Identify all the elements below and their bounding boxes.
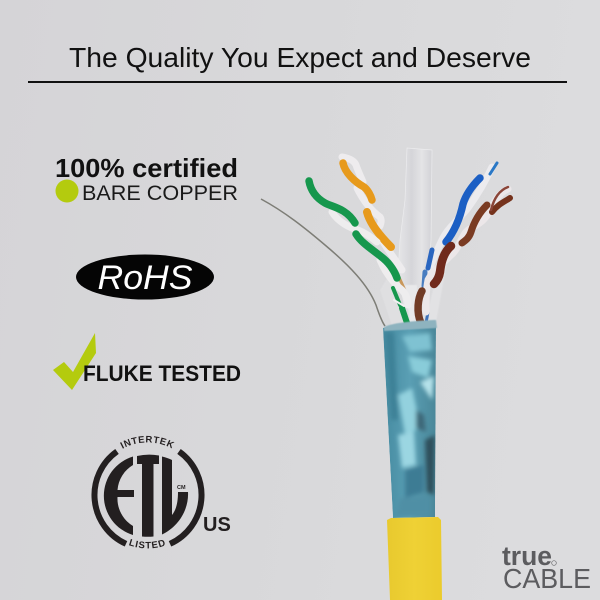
- registered mark: [552, 561, 556, 565]
- brown thin strand: [491, 187, 508, 210]
- blue tip: [490, 163, 497, 174]
- blue lower 2: [424, 272, 425, 286]
- white core: [342, 157, 402, 270]
- wire pair: orange: [342, 157, 407, 295]
- logo: ETL Intertek listed: [91, 436, 231, 548]
- badge: 100% certified bare copper: [55, 153, 238, 205]
- white core: [332, 212, 408, 305]
- orange strand lower: [367, 212, 391, 247]
- drain wire: [261, 199, 385, 326]
- text: true: true: [502, 541, 552, 571]
- icon: green dot: [56, 180, 78, 202]
- green strand 1: [309, 181, 355, 223]
- orange thin end: [398, 275, 407, 295]
- outer ring left arc: [94, 451, 126, 544]
- wire pair: blue: [424, 163, 497, 323]
- text: US: US: [203, 514, 231, 536]
- brown strand 3: [434, 246, 451, 284]
- white core: [427, 167, 492, 275]
- letter T: [137, 455, 159, 537]
- blue lower: [428, 250, 432, 268]
- letter E: [104, 456, 134, 535]
- foil shield: [383, 326, 436, 518]
- letter L: [162, 456, 188, 534]
- brown strand 2: [462, 205, 487, 243]
- white core: [426, 189, 508, 312]
- brown tip: [492, 198, 510, 212]
- tape lower white area: [405, 285, 418, 325]
- green white stripe: [394, 300, 404, 306]
- text: Fluke tested: FLUKE TESTED: [83, 361, 241, 386]
- right film: [426, 262, 447, 322]
- left film: [380, 270, 405, 326]
- blue bottom: [426, 312, 428, 323]
- text: bare copper: BARE COPPER: [82, 181, 238, 205]
- arc text: LISTED: LISTED: [129, 539, 165, 548]
- cut foil ring: [384, 320, 437, 331]
- text: CABLE: CABLE: [503, 563, 591, 594]
- text: RoHS: RoHS: [98, 259, 193, 297]
- arc text: INTERTEK: INTERTEK: [120, 436, 174, 449]
- foil creases: [385, 332, 435, 516]
- logo: trueCABLE: [502, 541, 591, 594]
- black ellipse: [76, 254, 214, 300]
- title: The Quality You Expect and Deserve: [69, 42, 531, 73]
- blue strand: [446, 178, 480, 242]
- badge: RoHS: [76, 254, 214, 300]
- cable photo: [261, 148, 510, 600]
- shield base: [383, 326, 436, 518]
- brown strand 4: [418, 291, 422, 323]
- badge: Fluke tested: [53, 333, 241, 390]
- wire pair: brown: [418, 187, 510, 323]
- title rule: [28, 81, 567, 83]
- outer ring right arc: [170, 451, 202, 544]
- orange strand: [343, 163, 372, 200]
- text: 100% certified: 100% certified: [55, 153, 238, 183]
- mark: CM: CM: [177, 485, 186, 491]
- icon: check mark: [53, 333, 96, 390]
- green strand 4: [402, 308, 408, 326]
- wire pair: green: [309, 181, 408, 326]
- green strand 3: [393, 288, 400, 305]
- clear tape: [398, 148, 432, 325]
- yellow jacket: [387, 517, 442, 600]
- green strand 2: [356, 234, 397, 278]
